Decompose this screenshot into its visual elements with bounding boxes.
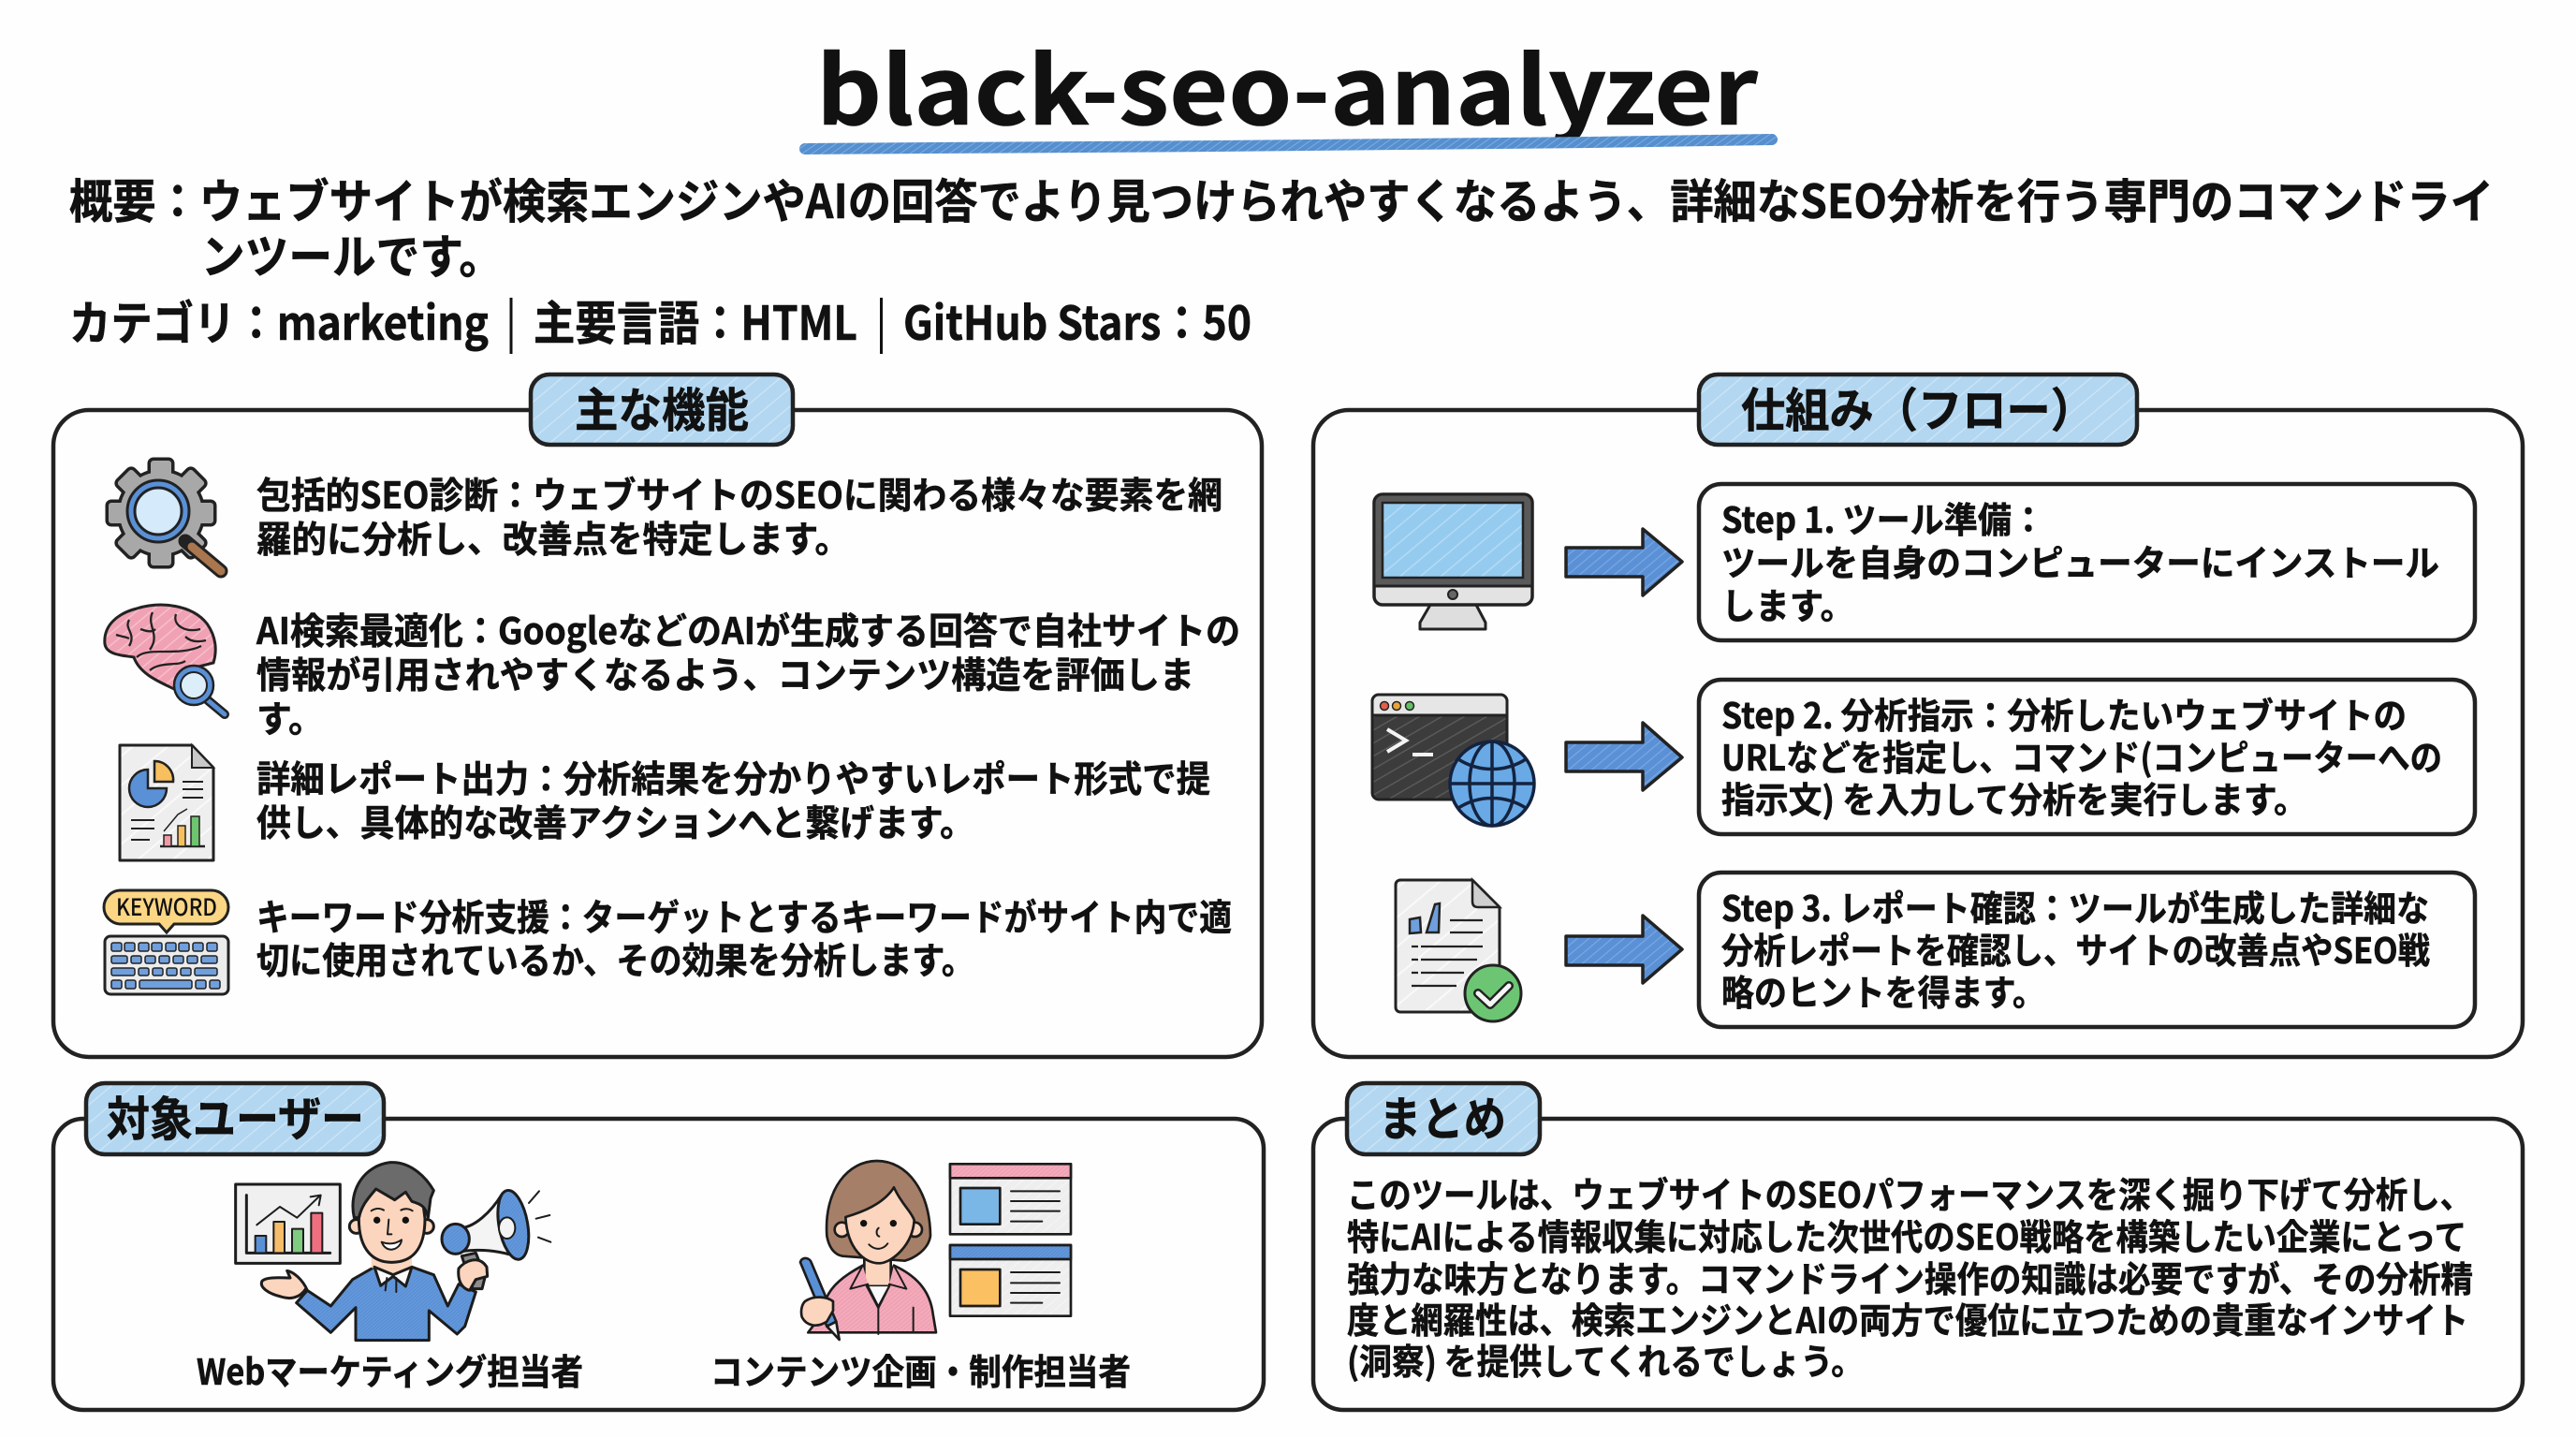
panel: summary bbox=[1313, 1082, 2523, 1410]
meta line: category, language, stars: カテゴリ：marketing bbox=[69, 286, 489, 354]
label: web marketer: Webマーケティング担当者 bbox=[197, 1343, 583, 1395]
text: AI search optimization: 情報が引用されやすくなるよう、コンテンツ構造を評価しま bbox=[256, 647, 1194, 699]
meta line: category, language, stars bbox=[69, 286, 1251, 354]
text: keyword analysis support bbox=[256, 889, 1232, 985]
summary text: 強力な味方となります。コマンドライン操作の知識は必要ですが、その分析精 bbox=[1347, 1251, 2473, 1302]
meta line: category, language, stars: 主要言語：HTML bbox=[534, 286, 857, 354]
step 1 box: ツールを自身のコンピューターにインストール bbox=[1721, 535, 2439, 586]
summary text: 特にAIによる情報収集に対応した次世代のSEO戦略を構築したい企業にとって bbox=[1347, 1209, 2466, 1260]
title underline bbox=[805, 139, 1772, 149]
step 2 box: 指示文) を入力して分析を実行します。 bbox=[1721, 771, 2307, 823]
step 1 box: Step 1. ツール準備： bbox=[1721, 492, 2045, 543]
panel: main features bbox=[53, 374, 1262, 1057]
text: comprehensive SEO diagnosis: 包括的SEO診断：ウェブサイトのSEOに関わる様々な要素を網 bbox=[256, 467, 1222, 520]
summary text bbox=[1347, 1167, 2473, 1385]
text: AI search optimization: AI検索最適化：GoogleなどのAIが生成する回答で自社サイトの bbox=[256, 603, 1240, 655]
panel: target users bbox=[53, 1082, 1264, 1410]
illustration: web marketer with megaphone bbox=[236, 1163, 550, 1341]
icon: report document bbox=[120, 745, 213, 860]
overview text bbox=[69, 165, 2494, 287]
heading: flow: 仕組み（フロー） bbox=[1741, 374, 2095, 441]
icon: gear with magnifier bbox=[109, 461, 221, 571]
summary text: 度と網羅性は、検索エンジンとAIの両方で優位に立つための貴重なインサイト bbox=[1347, 1292, 2468, 1343]
label: content planner: コンテンツ企画・制作担当者 bbox=[710, 1343, 1131, 1395]
icon: desktop monitor bbox=[1374, 494, 1532, 629]
heading: main features bbox=[531, 374, 793, 445]
step 3 box bbox=[1699, 873, 2475, 1027]
text: detailed report output: 詳細レポート出力：分析結果を分かりやすいレポート形式で提 bbox=[256, 751, 1210, 803]
summary text: このツールは、ウェブサイトのSEOパフォーマンスを深く掘り下げて分析し、 bbox=[1347, 1167, 2472, 1218]
text: keyword analysis support: キーワード分析支援：ターゲットとするキーワードがサイト内で適 bbox=[256, 889, 1232, 942]
text: detailed report output bbox=[256, 751, 1210, 847]
step 2 box: URLなどを指定し、コマンド(コンピューターへの bbox=[1721, 729, 2442, 781]
title: black-seo-analyzer bbox=[816, 16, 1758, 152]
illustration: content planner with cards bbox=[800, 1161, 1071, 1340]
step 1 box bbox=[1699, 484, 2475, 640]
text: AI search optimization: す。 bbox=[256, 691, 324, 743]
text: keyword analysis support: 切に使用されているか、その効果を分析します。 bbox=[256, 932, 974, 985]
step 3 box: 略のヒントを得ます。 bbox=[1721, 964, 2045, 1016]
arrow: step 3 bbox=[1566, 916, 1682, 983]
arrow: step 1 bbox=[1566, 529, 1682, 595]
meta line: category, language, stars: GitHub Stars：50 bbox=[903, 286, 1251, 354]
overview text: ンツールです。 bbox=[201, 220, 503, 287]
icon: document with check mark bbox=[1396, 880, 1521, 1021]
step 2 box bbox=[1699, 680, 2475, 834]
arrow: step 2 bbox=[1566, 723, 1682, 790]
icon: brain with magnifier bbox=[105, 605, 225, 714]
heading: main features: 主な機能 bbox=[575, 374, 749, 441]
text: comprehensive SEO diagnosis bbox=[256, 467, 1222, 564]
text: comprehensive SEO diagnosis: 羅的に分析し、改善点を特定します。 bbox=[256, 511, 850, 564]
heading: summary: まとめ bbox=[1379, 1082, 1506, 1150]
text: detailed report output: 供し、具体的な改善アクションへと繋げます。 bbox=[256, 795, 974, 847]
panel: how it works bbox=[1313, 374, 2523, 1057]
step 2 box: Step 2. 分析指示：分析したいウェブサイトの bbox=[1721, 687, 2407, 739]
text: AI search optimization bbox=[256, 603, 1240, 743]
heading: summary bbox=[1347, 1082, 1540, 1154]
icon: keyword bubble and keyboard: KEYWORD bbox=[116, 889, 217, 923]
step 1 box: します。 bbox=[1721, 578, 1854, 629]
step 3 box: 分析レポートを確認し、サイトの改善点やSEO戦 bbox=[1721, 922, 2430, 974]
step 3 box: Step 3. レポート確認：ツールが生成した詳細な bbox=[1721, 880, 2429, 932]
heading: target users: 対象ユーザー bbox=[107, 1082, 364, 1150]
summary text: (洞察) を提供してくれるでしょう。 bbox=[1347, 1333, 1864, 1385]
icon: keyword bubble and keyboard bbox=[104, 889, 228, 994]
icon: terminal and globe bbox=[1372, 695, 1534, 826]
